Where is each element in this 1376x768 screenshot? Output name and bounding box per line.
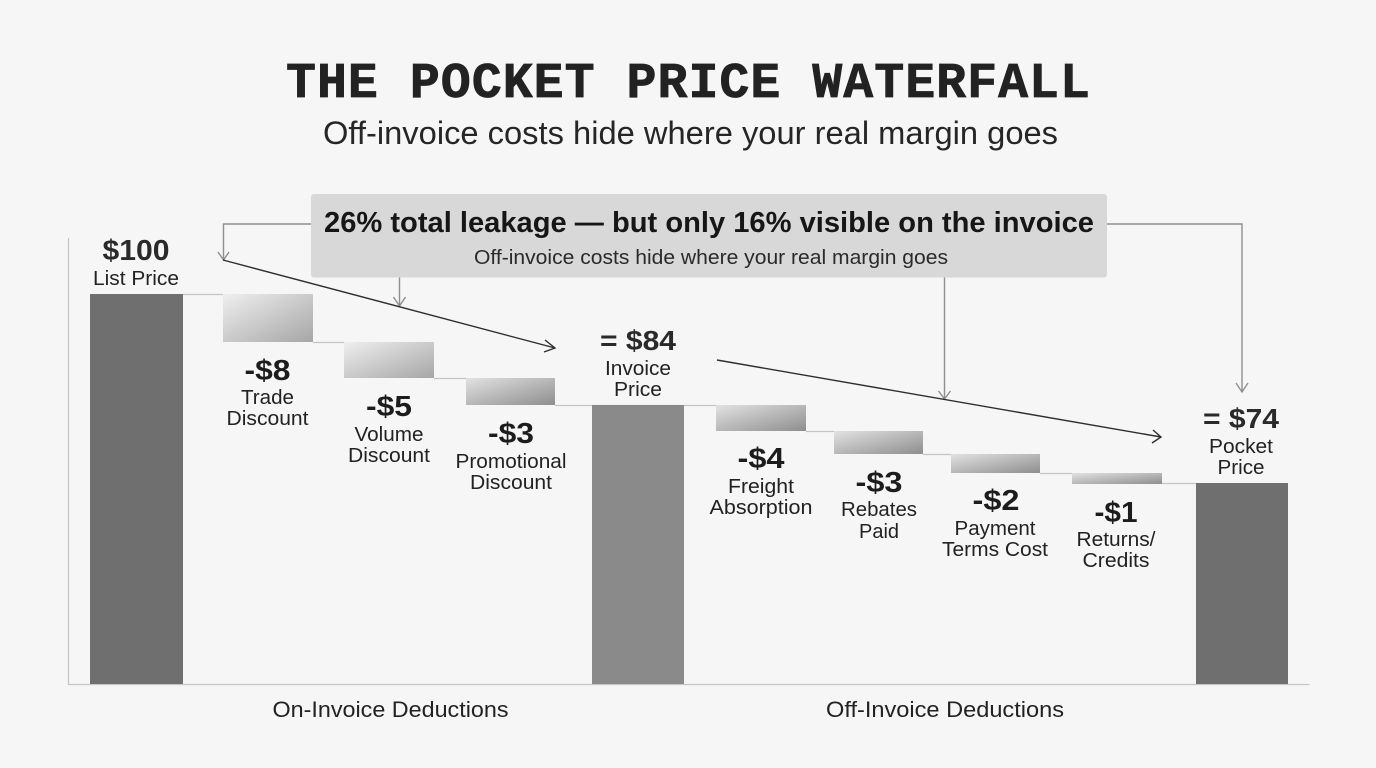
bar: invoice price: [592, 325, 684, 684]
callout box: [311, 194, 1107, 278]
section label: off-invoice deductions: Off-Invoice Deductions: [826, 697, 1064, 722]
label: payment terms cost: -$2: [972, 485, 1020, 517]
label: pocket price: Pocket: [1209, 436, 1273, 458]
label: promotional discount: Discount: [470, 472, 552, 494]
label: trade discount: Discount: [226, 408, 309, 430]
label: rebates paid: Paid: [859, 521, 899, 543]
label: rebates paid: Rebates: [841, 499, 917, 521]
label: rebates paid: [841, 467, 917, 543]
bar: pocket price: [1196, 403, 1288, 684]
title: THE POCKET PRICE WATERFALL: [286, 56, 1090, 113]
label: freight absorption: Absorption: [710, 497, 812, 519]
label: volume discount: Discount: [348, 445, 430, 467]
step: returns credits: [1072, 473, 1162, 572]
label: invoice price: Price: [614, 379, 662, 401]
label: returns credits: Credits: [1082, 550, 1150, 572]
bar: list price: [90, 235, 183, 684]
label: trade discount: [226, 355, 309, 430]
trend arrow: on-invoice: [223, 260, 555, 352]
step: trade discount: [223, 294, 313, 430]
label: $100 list price: List Price: [93, 268, 179, 290]
trend arrow: off-invoice: [717, 360, 1161, 443]
label: promotional discount: Promotional: [456, 451, 566, 473]
label: payment terms cost: Payment: [954, 518, 1036, 540]
step: promotional discount: [456, 378, 566, 494]
label: pocket price: [1203, 403, 1279, 479]
chart axes: [68, 238, 1310, 684]
label: promotional discount: [456, 418, 566, 494]
label: $100 list price: [93, 235, 179, 290]
label: volume discount: [348, 391, 430, 467]
label: returns credits: Returns/: [1076, 529, 1156, 551]
label: returns credits: -$1: [1094, 497, 1138, 529]
label: trade discount: -$8: [244, 355, 290, 387]
step: rebates paid: [834, 431, 923, 543]
label: payment terms cost: [942, 485, 1048, 561]
connector lines: [183, 294, 1196, 484]
subtitle: Off-invoice costs hide where your real margin goes: [323, 115, 1058, 151]
label: promotional discount: -$3: [488, 418, 534, 450]
step: volume discount: [344, 342, 434, 467]
label: volume discount: -$5: [366, 391, 412, 423]
label: invoice price: = $84: [600, 325, 676, 356]
label: rebates paid: -$3: [856, 467, 902, 499]
label: pocket price: Price: [1218, 457, 1264, 479]
label: payment terms cost: Terms Cost: [942, 539, 1048, 561]
callout subtext: Off-invoice costs hide where your real margin goes: [474, 247, 948, 269]
label: freight absorption: -$4: [738, 443, 784, 475]
label: volume discount: Volume: [354, 424, 424, 446]
step: freight absorption: [710, 405, 812, 519]
label: freight absorption: [710, 443, 812, 519]
label: invoice price: Invoice: [605, 358, 671, 380]
label: invoice price: [600, 325, 676, 401]
callout arrows: [218, 224, 1248, 399]
section label: on-invoice deductions: On-Invoice Deductions: [272, 697, 508, 722]
callout heading: 26% total leakage — but only 16% visible on the invoice: [324, 207, 1094, 239]
label: returns credits: [1076, 497, 1156, 572]
label: freight absorption: Freight: [728, 476, 794, 498]
label: $100 list price: $100: [102, 235, 170, 267]
label: trade discount: Trade: [241, 387, 294, 409]
label: pocket price: = $74: [1203, 403, 1279, 434]
step: payment terms cost: [942, 454, 1048, 561]
